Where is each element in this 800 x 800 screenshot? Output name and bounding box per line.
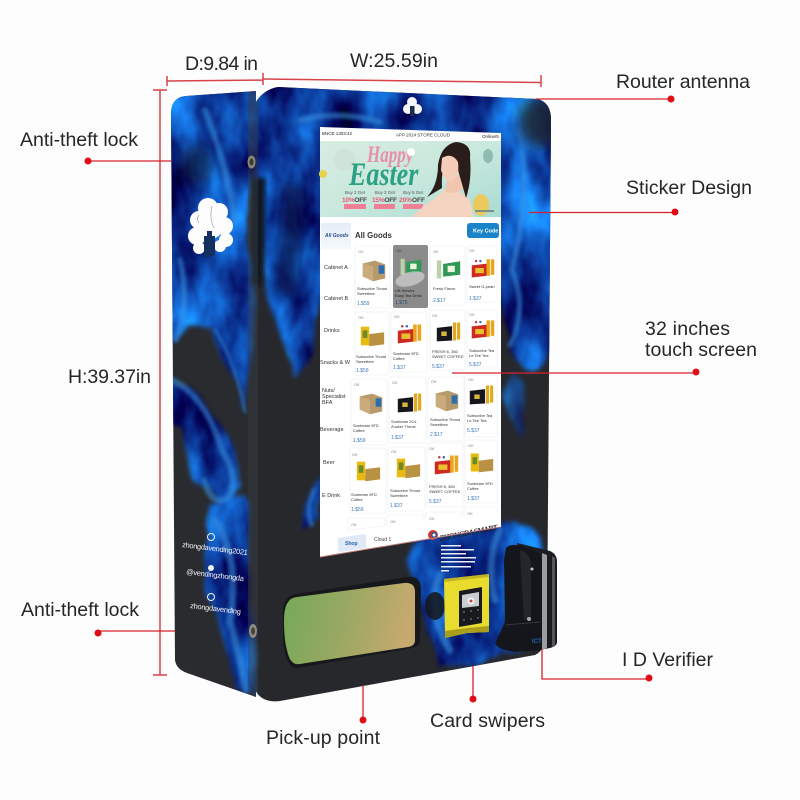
- seam between side and front: [248, 90, 258, 702]
- screen status bar: APP 2024 STORE CLOUD: [396, 132, 451, 138]
- product row 4: Sunbeam 9FD: [351, 492, 377, 497]
- product row 2: 5.$37: [469, 362, 482, 368]
- product row 4: Sweetbee: [390, 493, 409, 498]
- ID verifier: [495, 543, 557, 652]
- product row 5 partial: OK: [390, 519, 396, 524]
- sidebar categories: Beer: [323, 460, 335, 466]
- sidebar categories: BFA: [322, 400, 333, 406]
- callout: router antenna: Router antenna: [616, 71, 750, 93]
- product row 4: 1.$37: [467, 496, 480, 502]
- all goods sidebar tab: [321, 223, 351, 249]
- callout: router antenna: [536, 71, 750, 102]
- ID verifier: ICT: [532, 639, 542, 645]
- promo banner: [319, 141, 501, 217]
- callout: upper anti-theft lock: Anti-theft lock: [20, 129, 138, 151]
- lower anti-theft lock: [249, 624, 257, 638]
- product row 3: OK: [392, 380, 398, 385]
- callout: touch screen: 32 inches: [645, 318, 730, 340]
- product row 4: Sunbeam 9FD: [467, 481, 493, 486]
- promo banner: 10%OFF: [342, 197, 367, 204]
- callout: ID verifier: I D Verifier: [622, 649, 714, 671]
- promo banner: Happy: [366, 143, 414, 168]
- product row 2: Subscribe Tea: [469, 348, 495, 353]
- zhongda smart logo: ZHONGDA SMART: [438, 523, 499, 543]
- product row 1: 2.$17: [433, 298, 446, 304]
- social media handles: zhongdavending2021: [182, 540, 248, 557]
- promo banner: Buy 5 Get: [403, 190, 424, 195]
- product row 2: 1.$37: [393, 365, 406, 371]
- product row 3: [351, 375, 497, 445]
- product row 3: Le Tee Tea: [467, 418, 487, 423]
- callout: upper anti-theft lock: [20, 129, 171, 164]
- product row 4: Coffee: [351, 497, 363, 502]
- callout: touch screen: touch screen: [645, 339, 757, 361]
- card swiper: [425, 574, 489, 638]
- screen status bar: [322, 131, 499, 139]
- callout: lower anti-theft lock: [21, 599, 175, 636]
- promo banner: Buy 3 Get: [375, 190, 396, 195]
- light smoke wisps: [172, 110, 524, 690]
- product row 1: OK: [396, 248, 402, 253]
- banner woman: [412, 142, 494, 217]
- product row 3: Sunbeam 9FD: [353, 423, 379, 428]
- sidebar categories: Specialist: [322, 394, 346, 400]
- icon: router antenna logo on top: [403, 97, 422, 116]
- promo banner: Easter: [348, 157, 419, 193]
- product row 4: Coffee: [467, 486, 479, 491]
- product row 1: 1.$37: [469, 296, 482, 302]
- product row 1: Sweet G-pearl: [469, 284, 495, 289]
- product row 1: OK: [469, 248, 475, 253]
- product row 4: FRESH 6, 350: [429, 484, 456, 489]
- upper anti-theft lock: [248, 156, 256, 168]
- touch screen: [319, 127, 501, 557]
- product row 3: Zucker Thrust: [391, 424, 416, 429]
- product row 2: Sweetbee: [356, 359, 375, 364]
- social media handles: zhongdavending: [190, 601, 241, 616]
- sidebar categories: Bags: [320, 543, 333, 549]
- product row 1: 1.$75: [395, 300, 408, 306]
- product row 4: SWEET COFFEE: [429, 489, 461, 494]
- product row 4: Subscribe Thrust: [390, 488, 421, 493]
- product row 1: OK: [358, 249, 364, 254]
- product row 1: Fresh Flavor: [433, 286, 456, 291]
- callout: sticker design: Sticker Design: [626, 177, 752, 199]
- product row 2: OK: [394, 314, 400, 319]
- dimension: depth: [167, 53, 263, 86]
- callout: lower anti-theft lock: Anti-theft lock: [21, 599, 139, 621]
- sticker small instructions: [441, 545, 476, 572]
- product row 2: Subscribe Thrust: [356, 354, 387, 359]
- product row 1: Subscribe Thrust: [357, 286, 388, 291]
- product row 3: Sweetbee: [430, 422, 449, 427]
- product row 3: 1.$59: [353, 438, 366, 444]
- social media handles: [182, 534, 248, 616]
- product row 3: Sunbeam 2Cs: [391, 419, 416, 424]
- product row 1: Sweetbee: [357, 291, 376, 296]
- product row 1: 1.$59: [357, 301, 370, 307]
- product row 1: Lift Heroes: [395, 288, 414, 293]
- sidebar categories: Cabinet A: [324, 265, 348, 271]
- product row 2: Coffee: [393, 356, 405, 361]
- product row 2: Le Tee Tea: [469, 353, 489, 358]
- icon: vape cloud logo: [188, 198, 233, 257]
- product row 2: OK: [358, 315, 364, 320]
- promo banner: 20%OFF: [399, 197, 425, 204]
- product row 1: Easy Tea Drink: [395, 293, 422, 298]
- callout: card swipers: Card swipers: [430, 710, 545, 732]
- bottom nav: Cloud 1: [374, 537, 391, 543]
- product row 2: Sunbeam 9FD: [393, 351, 419, 356]
- dimension: width: W:25.59in: [350, 50, 438, 72]
- sidebar categories: E Drink: [322, 493, 340, 499]
- side panel: [171, 91, 256, 697]
- front panel: [247, 87, 551, 701]
- product row 2: 1.$59: [356, 368, 369, 374]
- product row 3: OK: [468, 377, 474, 382]
- social media handles: @vendingzhongda: [186, 567, 245, 583]
- product row 2: OK: [432, 313, 438, 318]
- product row 3: Subscribe Tea: [467, 413, 493, 418]
- dimension: depth: D:9.84 in: [185, 53, 258, 75]
- callout: ID verifier: [542, 649, 714, 682]
- product row 3: 5.$37: [467, 428, 480, 434]
- sidebar categories: [320, 265, 351, 549]
- product row 2: [355, 310, 497, 375]
- bottom nav: Shop: [345, 541, 358, 547]
- product row 3: 2.$17: [430, 432, 443, 438]
- product row 2: FRESH 6, 350: [432, 349, 459, 354]
- product row 4: OK: [429, 446, 435, 451]
- dark corner shading: [178, 96, 562, 300]
- bottom nav: [320, 512, 500, 557]
- machine: [160, 80, 562, 710]
- dimension: width: [263, 50, 541, 87]
- product row 4: [350, 440, 497, 513]
- callout: sticker design: [529, 177, 752, 216]
- product row 4: 1.$59: [351, 507, 364, 513]
- key code button: [467, 223, 499, 238]
- product row 1: [355, 245, 497, 308]
- screen status bar: BNCE 1303:42: [322, 131, 353, 136]
- product row 4: OK: [468, 443, 474, 448]
- dimension: height: H:39.37in: [68, 366, 151, 388]
- product row 3: Subscribe Thrust: [430, 417, 461, 422]
- product row 4: 1.$37: [390, 503, 403, 509]
- product row 2: OK: [469, 312, 475, 317]
- screen status bar: Online/5: [482, 134, 499, 139]
- product row 4: OK: [391, 449, 397, 454]
- callout: pick-up point: [266, 685, 381, 749]
- sidebar categories: Nuts/: [322, 388, 335, 394]
- product row 2: 5.$37: [432, 364, 445, 370]
- callout: pick-up point: Pick-up point: [266, 727, 381, 749]
- product row 3: 1.$37: [391, 435, 404, 441]
- all goods heading: All Goods: [355, 231, 392, 240]
- product row 4: OK: [352, 452, 358, 457]
- product row 5 partial: OK: [467, 511, 473, 516]
- key code button: Key Code: [473, 228, 498, 234]
- product row 3: OK: [431, 379, 437, 384]
- product row 5 partial: OK: [429, 516, 435, 521]
- callout: card swipers: [430, 666, 545, 732]
- sidebar categories: Beverage: [320, 427, 344, 433]
- promo banner: 15%OFF: [372, 197, 397, 204]
- product row 2: SWEET COFFEE: [432, 354, 464, 359]
- callout: touch screen: [452, 318, 757, 376]
- product row 1: OK: [433, 249, 439, 254]
- sidebar categories: Snacks & W: [320, 360, 351, 366]
- product row 3: OK: [354, 382, 360, 387]
- dimension: height: [68, 90, 167, 675]
- product row 3: Coffee: [353, 428, 365, 433]
- product row 4: 5.$37: [429, 499, 442, 505]
- sidebar categories: Drinks: [324, 328, 340, 334]
- product row 5 partial: OK: [351, 522, 357, 527]
- blue smoke sticker design: [160, 80, 562, 710]
- promo banner: Buy 2 Get: [345, 190, 366, 195]
- pick-up window: [283, 577, 421, 668]
- all goods sidebar tab: All Goods: [324, 233, 349, 239]
- product row 5 partial: [348, 507, 497, 530]
- sidebar categories: Cabinet B: [324, 296, 348, 302]
